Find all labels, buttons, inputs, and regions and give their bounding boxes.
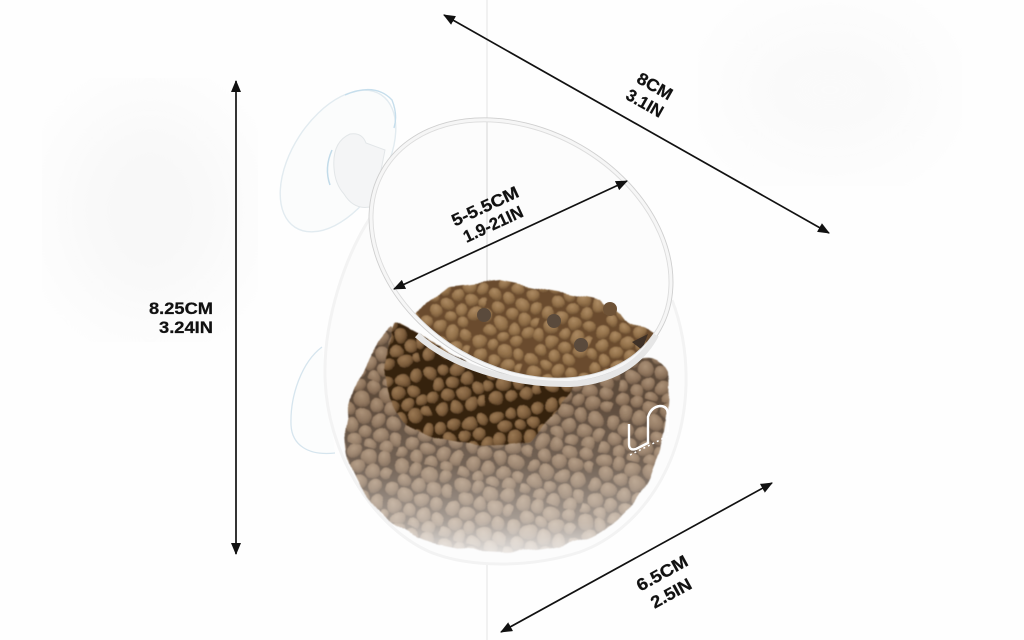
dimension label: height — [149, 299, 213, 337]
pellets: lower layer seen through glass — [345, 326, 668, 551]
suction cup: bottom — [291, 347, 335, 453]
dimension arrow: base width — [501, 483, 772, 632]
dimension arrow: height — [235, 81, 237, 554]
dimension label: base width: 2.5IN — [647, 575, 695, 612]
dimension label: opening diameter: 5-5.5CM — [449, 183, 522, 230]
dimension label: height: 8.25CM — [149, 299, 213, 318]
dimension label: base width: 6.5CM — [633, 552, 691, 595]
dimension label: base width — [633, 552, 695, 612]
suction cup: top — [256, 70, 420, 252]
pellets: upper layer inside rim — [415, 279, 654, 378]
pellets: dark layer behind rim — [387, 322, 572, 445]
glass body — [325, 215, 686, 564]
dimension label: height: 3.24IN — [159, 318, 213, 337]
rim interior — [326, 70, 716, 430]
back wall line through glass — [486, 122, 488, 285]
dark pellet at rim edge — [632, 334, 648, 350]
logo mark on glass — [629, 406, 668, 455]
dimension label: top width: 8CM — [634, 69, 676, 104]
dimension label: opening diameter — [449, 183, 526, 247]
dimension label: top width — [623, 69, 676, 122]
dimension arrow: opening diameter — [394, 181, 627, 289]
dimension label: top width: 3.1IN — [623, 85, 667, 122]
dimension label: opening diameter: 1.9-21IN — [460, 202, 526, 247]
dimension arrow: top width — [444, 15, 829, 233]
glass rim — [321, 65, 721, 435]
stem knob — [334, 134, 385, 208]
